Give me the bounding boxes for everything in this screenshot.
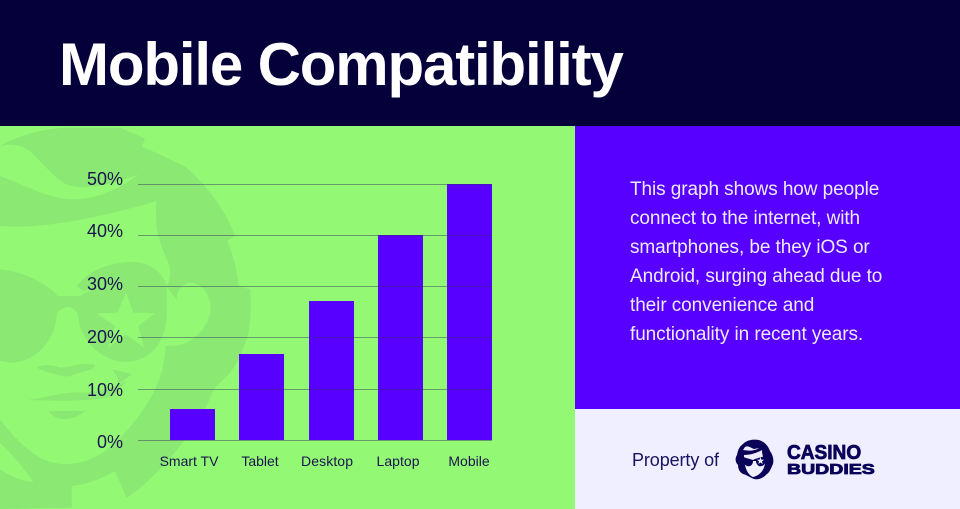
bar chart: [87, 169, 492, 469]
bar: Laptop: [378, 235, 423, 440]
panel: description: [575, 126, 960, 409]
property of text: Property of: [632, 450, 719, 470]
y axis labels: 10%: [87, 380, 123, 400]
panel: chart: [0, 126, 575, 509]
description text: functionality in recent years.: [630, 324, 863, 345]
bar: Tablet: [239, 354, 284, 440]
x axis labels: Mobile: [448, 453, 490, 469]
title: Mobile Compatibility: [59, 31, 623, 98]
x axis labels: Desktop: [301, 453, 353, 469]
y axis labels: 20%: [87, 327, 123, 347]
x axis labels: Tablet: [241, 453, 279, 469]
panel: property of: [575, 409, 960, 509]
header band: [0, 0, 960, 126]
logo wordmark: [787, 441, 875, 478]
description text: their convenience and: [630, 295, 814, 316]
x axis labels: Laptop: [376, 453, 420, 469]
y axis labels: 50%: [87, 169, 123, 189]
y axis labels: 30%: [87, 274, 123, 294]
y axis labels: 0%: [97, 432, 123, 452]
bar: Desktop: [309, 301, 354, 440]
description text: connect to the internet, with: [630, 208, 860, 229]
description text: Android, surging ahead due to: [630, 266, 882, 287]
logo: Casino Buddies: [736, 440, 875, 480]
y axis labels: [87, 169, 123, 452]
description text: This graph shows how people: [630, 179, 879, 200]
x axis labels: [160, 453, 490, 469]
bar: Mobile: [447, 184, 492, 440]
y axis labels: 40%: [87, 221, 123, 241]
x axis labels: Smart TV: [160, 453, 219, 469]
wordmark: Buddies: BUDDIES: [787, 461, 875, 478]
watermark: face with sunglasses: [0, 128, 250, 509]
logo icon: face: [736, 440, 774, 480]
wordmark: Casino: CASINO: [787, 441, 861, 464]
description text: [630, 179, 882, 345]
bar: Smart TV: [170, 409, 215, 440]
description text: smartphones, be they iOS or: [630, 237, 870, 258]
